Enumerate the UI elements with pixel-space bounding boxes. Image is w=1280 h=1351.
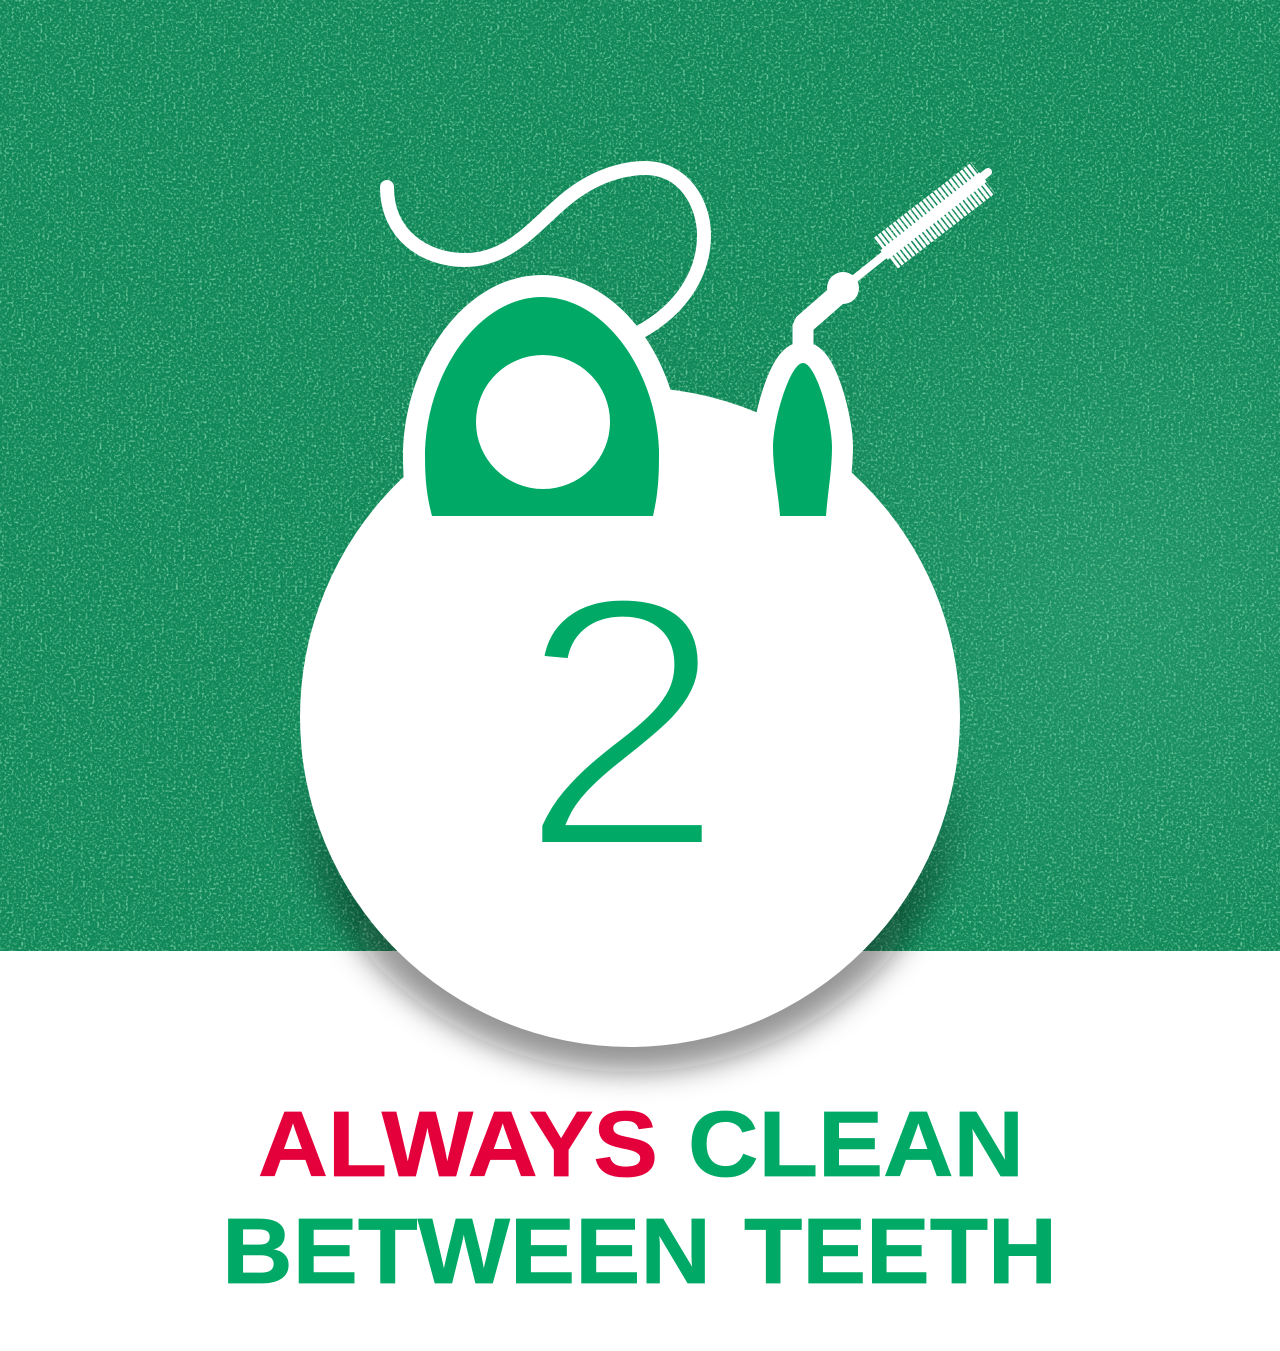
brush core: [884, 177, 983, 255]
handle green body: [773, 363, 832, 516]
step number: 2: [518, 521, 726, 924]
handle white outline: [773, 363, 832, 516]
spool green body: [425, 297, 659, 516]
heading line one: [258, 1092, 1024, 1196]
heading line two: TEETH: [744, 1199, 1057, 1303]
white number circle: [300, 387, 960, 1047]
floss thread: [387, 168, 704, 332]
textured green background: [0, 0, 1280, 951]
brush joint: [827, 272, 859, 304]
circle drop shadow: [283, 398, 977, 1072]
spool white outline: [425, 297, 659, 516]
brush bristles: [886, 178, 983, 253]
heading line one: CLEAN: [688, 1092, 1024, 1196]
brush wire: [843, 172, 988, 288]
heading line two: [222, 1199, 1057, 1303]
icon: dental floss spool: [387, 168, 704, 516]
spool hole: [476, 355, 610, 489]
heading line two: BETWEEN: [222, 1199, 711, 1303]
icon: interdental brush: [773, 172, 988, 516]
heading line one: ALWAYS: [258, 1092, 658, 1196]
brush neck: [803, 290, 843, 350]
